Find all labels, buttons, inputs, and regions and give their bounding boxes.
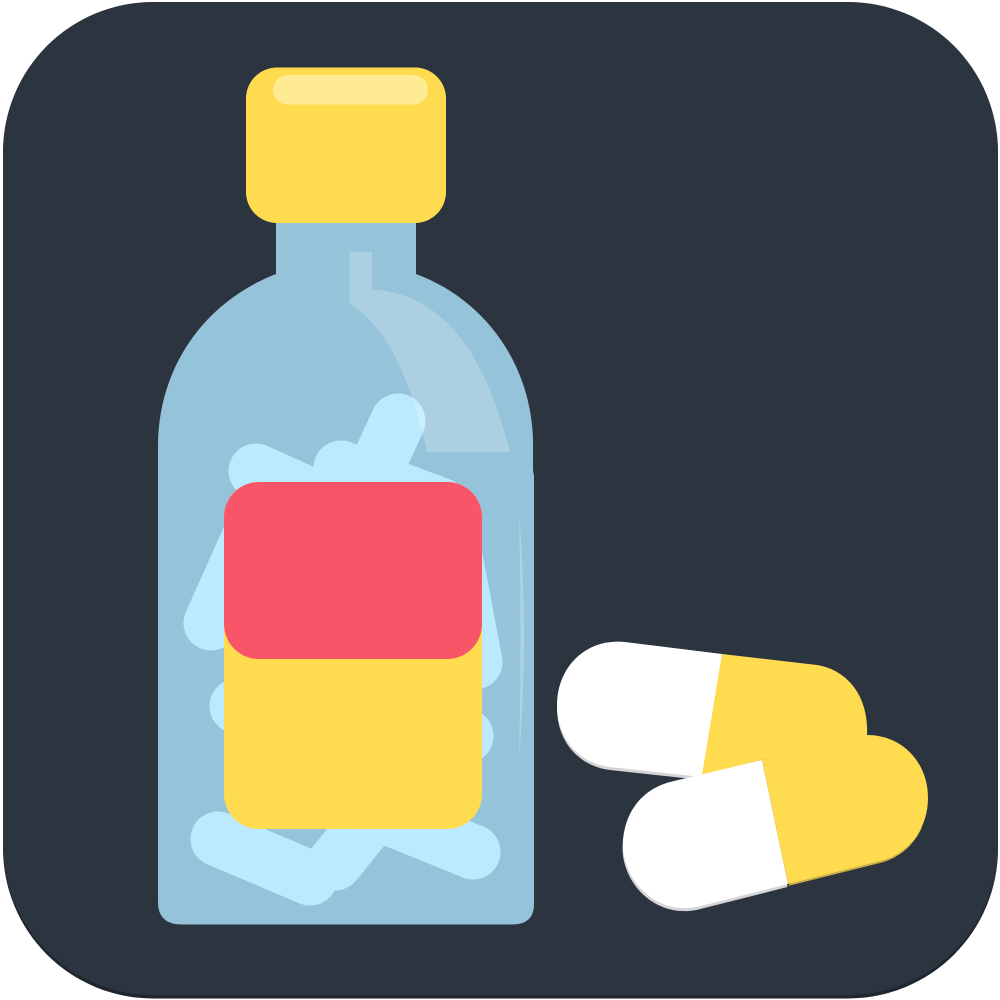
bottle cap [246, 68, 446, 223]
pills inside the bottle [211, 421, 475, 878]
capsule white half [557, 642, 722, 777]
capsule: lower [622, 735, 928, 911]
label yellow lower part [224, 482, 482, 829]
label red upper part [224, 482, 482, 659]
glass highlight on side [519, 512, 524, 760]
capsule yellow half [762, 735, 928, 884]
medicine bottle [158, 68, 534, 924]
cap highlight [273, 75, 428, 104]
capsule shadow [557, 645, 722, 780]
glass highlight on shoulder [350, 252, 510, 452]
bottle body [158, 215, 534, 924]
capsule yellow half [702, 654, 867, 775]
capsule white half [623, 760, 788, 908]
capsule: upper [557, 642, 867, 780]
capsule shadow [622, 763, 788, 911]
